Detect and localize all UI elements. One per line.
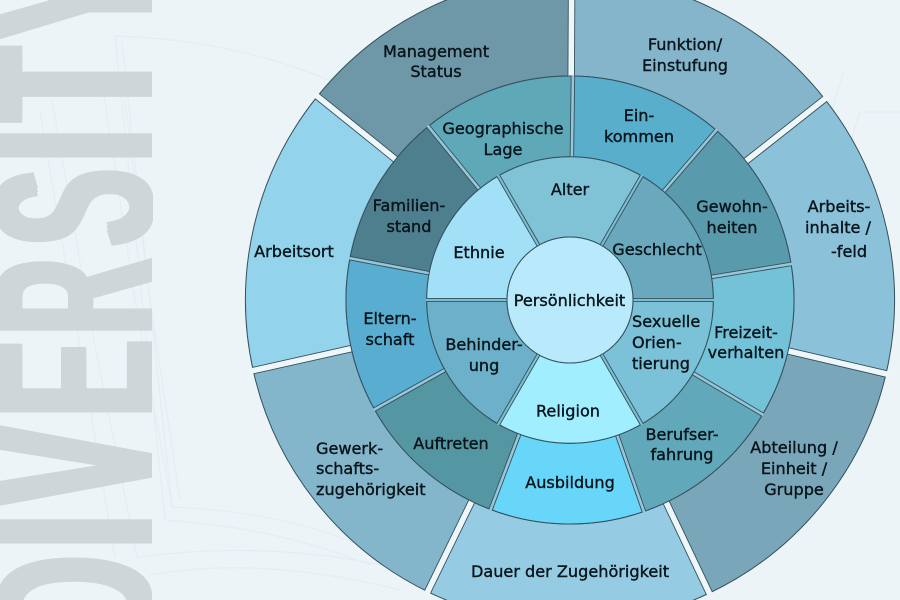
ring: inner core dimensions bbox=[427, 157, 713, 443]
segment: Gewohnheiten: Gewohn- bbox=[696, 197, 768, 216]
segment: Dauer der Zugehörigkeit: Dauer der Zugehörigkeit bbox=[471, 562, 669, 581]
segment: Religion bbox=[498, 355, 642, 443]
segment: Arbeitsinhalte / -feld bbox=[745, 99, 896, 374]
segment: Religion: Religion bbox=[536, 402, 600, 420]
segment: Arbeitsort bbox=[245, 96, 396, 371]
segment: Auftreten: Auftreten bbox=[413, 434, 489, 453]
segment: Geographische Lage bbox=[427, 74, 573, 190]
segment: Behinderung: Behinder- bbox=[445, 335, 523, 354]
segment: Management Status bbox=[317, 0, 572, 160]
segment: Sexuelle Orientierung: Sexuelle bbox=[632, 312, 700, 331]
centre: Persönlichkeit: Persönlichkeit bbox=[514, 291, 625, 310]
segment: Geographische Lage: Geographische bbox=[442, 119, 564, 138]
segment: Freizeitverhalten bbox=[693, 263, 794, 415]
segment: Geschlecht: Geschlecht bbox=[612, 240, 702, 259]
segment: Einkommen: Ein- bbox=[624, 106, 655, 125]
segment: Sexuelle Orientierung bbox=[602, 300, 713, 424]
segment: Familienstand: stand bbox=[387, 217, 431, 236]
segment: Management Status: Status bbox=[410, 62, 462, 81]
segment: Gewerkschaftszugehörigkeit: schafts- bbox=[316, 459, 379, 478]
segment: Gewerkschaftszugehörigkeit: Gewerk- bbox=[316, 439, 383, 458]
segment: Berufserfahrung: Berufser- bbox=[645, 425, 719, 444]
segment: Arbeitsinhalte / -feld: -feld bbox=[831, 242, 867, 261]
segment: Arbeitsort: Arbeitsort bbox=[254, 242, 334, 261]
segment: Abteilung / Einheit / Gruppe: Gruppe bbox=[764, 480, 824, 499]
segment: Management Status: Management bbox=[383, 42, 489, 61]
segment: Elternschaft: Eltern- bbox=[363, 309, 417, 328]
segment: Gewerkschaftszugehörigkeit bbox=[252, 348, 473, 592]
segment: Familienstand: Familien- bbox=[373, 196, 446, 215]
segment: Gewohnheiten bbox=[662, 130, 793, 278]
segment: Einkommen: kommen bbox=[604, 127, 674, 146]
segment: Dauer der Zugehörigkeit bbox=[428, 501, 710, 600]
segment: Behinderung: ung bbox=[469, 356, 499, 375]
segment: Gewohnheiten: heiten bbox=[706, 218, 758, 237]
segment: Arbeitsinhalte / -feld: inhalte / bbox=[805, 218, 872, 237]
segment: Abteilung / Einheit / Gruppe: Einheit / bbox=[761, 459, 828, 478]
segment: Freizeitverhalten: Freizeit- bbox=[714, 323, 778, 342]
segment: Ethnie bbox=[427, 176, 538, 300]
segment: Funktion / Einstufung bbox=[571, 0, 825, 162]
segment: Alter: Alter bbox=[551, 180, 590, 199]
segment: Berufserfahrung: fahrung bbox=[651, 445, 713, 464]
segment: Funktion / Einstufung: Funktion/ bbox=[648, 35, 723, 54]
segment: Abteilung / Einheit / Gruppe bbox=[666, 350, 886, 594]
segment: Gewerkschaftszugehörigkeit: zugehörigkeit bbox=[316, 480, 426, 499]
segment: Ausbildung bbox=[490, 434, 645, 525]
segment: Berufserfahrung bbox=[616, 372, 763, 513]
segment: Sexuelle Orientierung: Orien- bbox=[632, 333, 682, 352]
segment: Ethnie: Ethnie bbox=[453, 243, 505, 262]
segment: Arbeitsinhalte / -feld: Arbeits- bbox=[808, 197, 871, 216]
segment: Auftreten bbox=[373, 369, 520, 510]
segment: Behinderung bbox=[427, 300, 538, 424]
segment: Funktion / Einstufung: Einstufung bbox=[642, 56, 728, 75]
segment: Geschlecht bbox=[602, 176, 713, 300]
segment: Abteilung / Einheit / Gruppe: Abteilung / bbox=[750, 438, 838, 457]
segment: Sexuelle Orientierung: tierung bbox=[632, 354, 690, 373]
ring: outer organisational dimensions bbox=[245, 0, 896, 600]
heading: DIVERSITY vertical watermark bbox=[0, 0, 153, 600]
segment: Familienstand bbox=[350, 126, 480, 274]
segment: Freizeitverhalten: verhalten bbox=[708, 343, 784, 362]
segment: Ausbildung: Ausbildung bbox=[525, 473, 615, 492]
segment: Geographische Lage: Lage bbox=[484, 140, 523, 159]
centre: Persönlichkeit bbox=[507, 237, 633, 363]
segment: Elternschaft bbox=[345, 258, 446, 410]
ring: middle external dimensions bbox=[345, 74, 794, 525]
segment: Einkommen bbox=[571, 76, 717, 192]
segment: Alter bbox=[498, 157, 642, 245]
segment: Elternschaft: schaft bbox=[366, 330, 414, 349]
